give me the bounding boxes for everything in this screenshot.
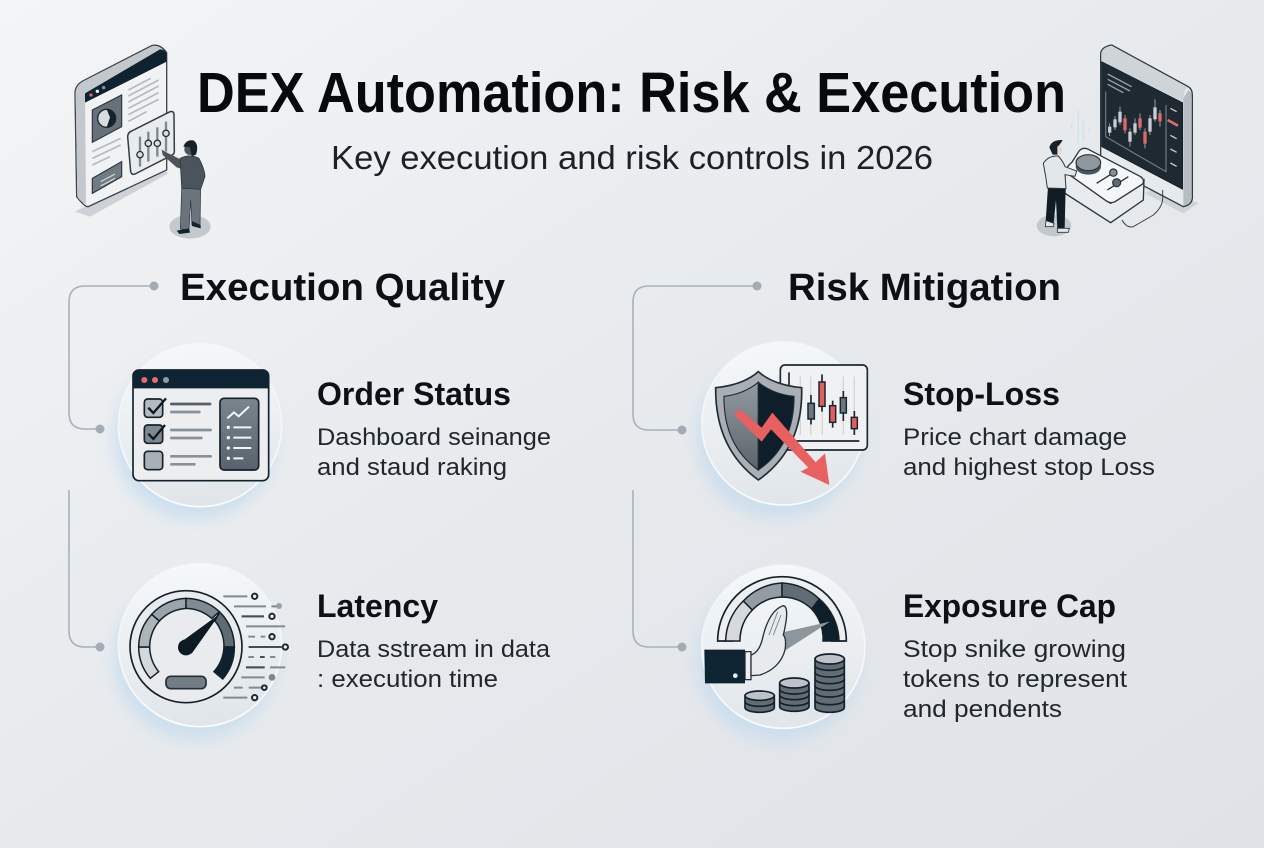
text block: exposure cap: and pendents <box>903 696 1062 723</box>
text block: latency: Data sstream in data <box>317 636 550 663</box>
icon: stop-loss shield and chart <box>697 342 867 518</box>
heading: risk mitigation: Risk Mitigation <box>788 267 1061 309</box>
text block: stop-loss: Price chart damage <box>903 424 1127 451</box>
illustration: person adjusting dashboard sliders <box>75 45 211 239</box>
text block: latency: : execution time <box>317 666 498 693</box>
connector: order status to latency <box>69 490 104 652</box>
heading: execution quality: Execution Quality <box>180 267 505 309</box>
text block: exposure cap: Exposure Cap <box>903 588 1116 624</box>
title: DEX Automation: Risk & Execution <box>197 61 1066 125</box>
text block: exposure cap <box>903 588 1127 723</box>
text block: order status: Order Status <box>317 376 511 412</box>
connector: execution quality to order status <box>69 282 158 434</box>
text block: stop-loss: Stop-Loss <box>903 376 1060 412</box>
text block: latency: Latency <box>317 588 438 624</box>
text block: stop-loss: and highest stop Loss <box>903 454 1155 481</box>
connector: risk mitigation to stop-loss <box>633 282 762 434</box>
text block: order status: and staud raking <box>317 454 507 481</box>
illustration: person at trading console and monitor <box>1037 45 1198 236</box>
subtitle: Key execution and risk controls in 2026 <box>331 139 933 176</box>
text block: latency <box>317 588 550 693</box>
text block: stop-loss <box>903 376 1155 481</box>
text block: exposure cap: tokens to represent <box>903 666 1127 693</box>
text block: order status <box>317 376 551 481</box>
text block: order status: Dashboard seinange <box>317 424 551 451</box>
icon: exposure cap gauge, hand and coins <box>697 565 865 742</box>
connector: stop-loss to exposure cap <box>633 490 686 652</box>
icon: latency gauge <box>113 563 288 740</box>
icon: order status dashboard <box>113 343 282 520</box>
text block: exposure cap: Stop snike growing <box>903 636 1126 663</box>
